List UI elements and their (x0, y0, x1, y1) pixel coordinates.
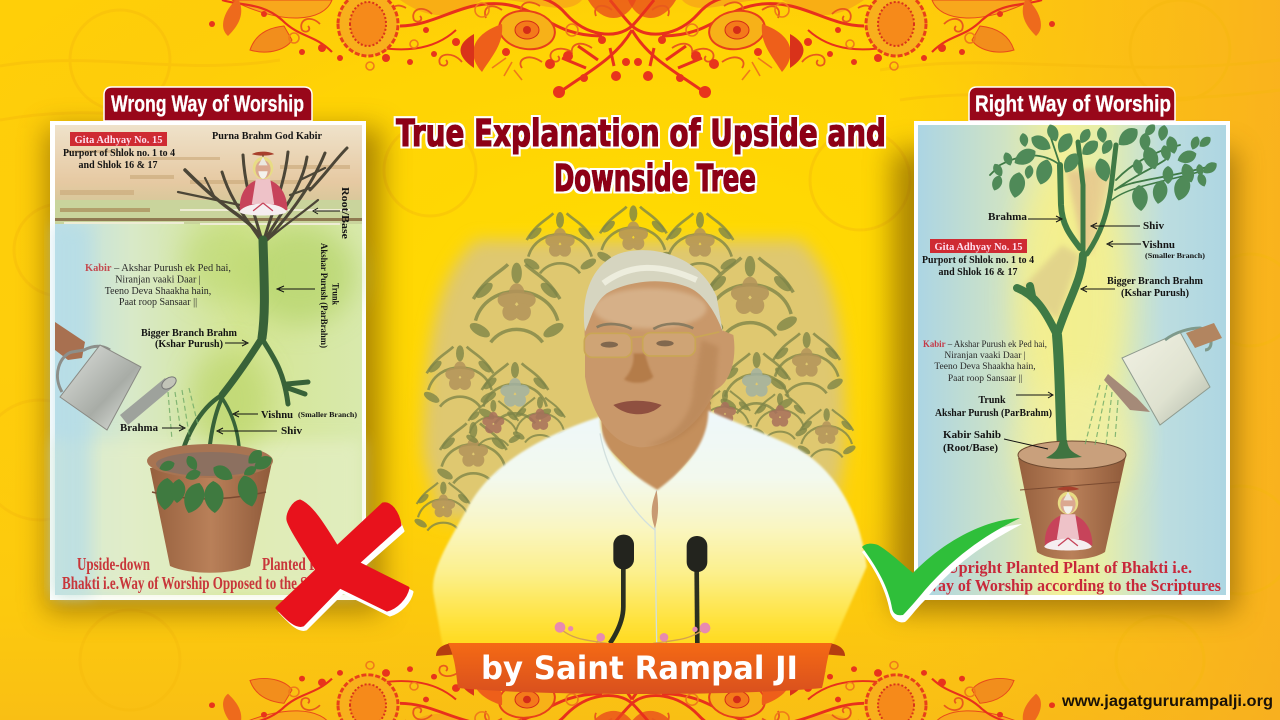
tree part labels: Vishnu (1142, 240, 1175, 251)
eyes and brows (597, 324, 693, 348)
watercolor ground (55, 125, 362, 595)
website url: www.jagatgururampalji.org (1061, 693, 1273, 710)
tree part labels: (Kshar Purush) (1121, 288, 1189, 299)
tree part labels: (Smaller Branch) (298, 410, 358, 419)
tree part labels: Brahma (120, 423, 158, 434)
kabir verse (85, 263, 231, 308)
watering can (1085, 323, 1222, 445)
side labels on the roots and trunk: Akshar Purush (ParBrahm) (318, 243, 329, 348)
tree part labels: Bigger Branch Brahm (1107, 276, 1204, 287)
glasses (584, 332, 719, 357)
poster caption: Planted Plant of (262, 554, 355, 574)
icon: green check mark (862, 518, 1022, 622)
heading tab: wrong way (104, 87, 312, 121)
panel text: scripture note (922, 239, 1034, 278)
flower pot (147, 444, 273, 573)
ribbon banner: by Saint Rampal JI (481, 649, 798, 687)
flower pot with figure of Kabir (1018, 440, 1126, 560)
panel text: scripture note: and Shlok 16 & 17 (79, 160, 157, 171)
side labels on the roots and trunk: Trunk (330, 283, 340, 306)
icon: red cross (277, 501, 412, 629)
heading tab: wrong way: Wrong Way of Worship (111, 90, 304, 116)
panel text: scripture note (63, 131, 323, 171)
watercolor ground (918, 125, 1226, 595)
panel shadows (46, 128, 1236, 612)
poster caption: Upright Planted Plant of Bhakti i.e. (947, 558, 1192, 577)
panel: wrong way of worship (50, 87, 366, 600)
side labels on the roots and trunk (318, 187, 350, 348)
arrows (1004, 216, 1141, 449)
kabir verse: Teeno Deva Shaakha hain, (934, 362, 1036, 372)
panel text: scripture note: Gita Adhyay No. 15 (74, 135, 162, 146)
top ornament (209, 0, 1055, 98)
tree part labels: Bigger Branch Brahm (141, 328, 238, 339)
title: True Explanation of Upside and (396, 112, 886, 155)
white shirt (433, 411, 867, 650)
upright tree branches (990, 135, 1215, 448)
watering can (55, 322, 198, 440)
panel text: scripture note: Purna Brahm God Kabir (212, 131, 323, 142)
figure of Kabir in the roots (239, 152, 287, 216)
poster caption: Way of Worship according to the Scriptures (923, 576, 1221, 595)
panel text: scripture note: Purport of Shlok no. 1 to 4 (922, 255, 1034, 266)
face (585, 252, 734, 447)
tree part labels (935, 212, 1206, 454)
poster frame (914, 121, 1230, 600)
poster caption (62, 554, 358, 593)
ribbon banner (436, 643, 845, 694)
kabir verse: Niranjan vaaki Daar | (115, 274, 201, 286)
bottom ornament (209, 635, 1055, 720)
tree part labels: Kabir Sahib (943, 430, 1001, 441)
kabir verse: Paat roop Sansaar || (119, 297, 197, 308)
kabir verse: Kabir – Akshar Purush ek Ped hai, (923, 340, 1047, 350)
microphones (610, 535, 707, 643)
tree leaves (990, 122, 1219, 212)
kabir verse: Kabir – Akshar Purush ek Ped hai, (85, 263, 231, 274)
poster caption: Bhakti i.e.Way of Worship Opposed to the Scriptures (62, 573, 358, 593)
kabir verse (923, 340, 1047, 384)
heading tab: right way: Right Way of Worship (975, 90, 1171, 116)
tree part labels: (Smaller Branch) (1145, 251, 1206, 260)
portrait: Saint Rampal Ji (413, 205, 867, 650)
collar and placket (600, 433, 657, 643)
tree part labels: Vishnu (261, 410, 293, 421)
tree part labels: Shiv (1143, 221, 1164, 232)
panel text: scripture note: Purport of Shlok no. 1 to 4 (63, 148, 175, 159)
neck (600, 400, 713, 497)
poster frame (50, 121, 366, 600)
poster caption (923, 558, 1221, 595)
tree part labels: (Root/Base) (943, 443, 998, 454)
tree part labels: Brahma (988, 212, 1027, 223)
tree part labels (120, 328, 358, 437)
hair (584, 250, 723, 332)
tree part labels: Shiv (281, 426, 302, 437)
inverted tree (178, 240, 308, 477)
side labels on the roots and trunk: Root/Base (339, 187, 350, 240)
hanging leaves (155, 447, 275, 516)
arrows (162, 208, 340, 434)
tree part labels: (Kshar Purush) (155, 339, 223, 350)
title: Downside Tree (554, 157, 756, 200)
kabir verse: Teeno Deva Shaakha hain, (105, 286, 211, 297)
panel text: scripture note: and Shlok 16 & 17 (939, 267, 1017, 278)
tree part labels: Trunk (978, 395, 1006, 406)
kabir verse: Paat roop Sansaar || (948, 374, 1022, 384)
kabir verse: Niranjan vaaki Daar | (944, 351, 1026, 361)
panel: right way of worship (914, 87, 1230, 600)
pink floral tips (555, 622, 710, 643)
poster caption: Upside-down (77, 554, 150, 574)
tapestry backdrop (413, 205, 857, 531)
bare roots at top (178, 148, 347, 244)
panel text: scripture note: Gita Adhyay No. 15 (934, 242, 1022, 253)
tree part labels: Akshar Purush (ParBrahm) (935, 408, 1052, 419)
heading tab: right way (969, 87, 1175, 121)
title (396, 112, 886, 200)
